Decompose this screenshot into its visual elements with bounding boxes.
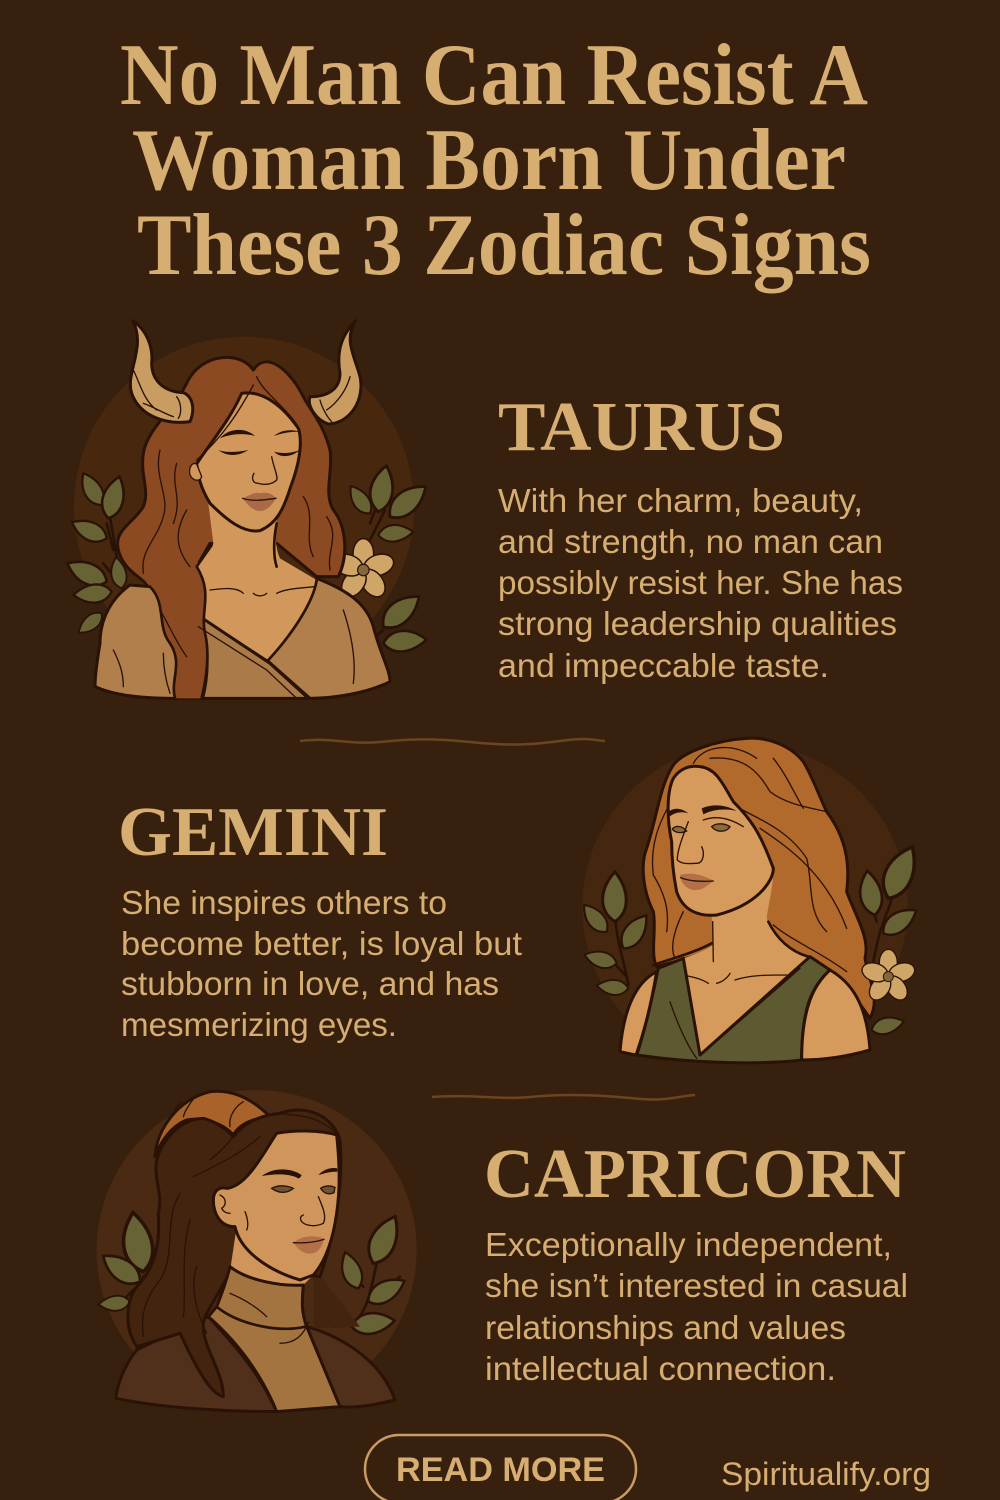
illustration: Gemini woman	[560, 738, 940, 1080]
text: Gemini description: She inspires others to	[121, 884, 447, 921]
Taurus left horn	[130, 321, 193, 422]
text: Capricorn description: relationships and values	[485, 1309, 846, 1346]
text: Gemini description	[121, 884, 522, 1043]
title: These 3 Zodiac Signs	[137, 197, 871, 294]
text: Taurus description: With her charm, beauty,	[498, 482, 863, 519]
illustration: Taurus woman with horns	[50, 321, 450, 710]
heading: Capricorn: CAPRICORN	[484, 1136, 906, 1213]
title: Woman Born Under	[132, 112, 846, 209]
text: Taurus description: and impeccable taste.	[498, 647, 829, 684]
text: Taurus description: and strength, no man can	[498, 523, 883, 560]
text: Gemini description: stubborn in love, and has	[121, 965, 499, 1002]
heading: Gemini: GEMINI	[118, 794, 388, 871]
text: Gemini description: become better, is loyal but	[121, 925, 522, 962]
Taurus right horn	[309, 321, 361, 424]
title	[120, 27, 871, 294]
text: Taurus description	[498, 482, 903, 684]
text: Capricorn description: intellectual connection.	[485, 1350, 836, 1387]
heading: Taurus: TAURUS	[498, 389, 785, 466]
Taurus front lock of hair	[130, 545, 212, 698]
illustration: Capricorn woman	[80, 1090, 430, 1428]
text: Gemini description: mesmerizing eyes.	[121, 1006, 397, 1043]
text: Capricorn description: she isn’t interested in casual	[485, 1267, 908, 1304]
site name: Spiritualify.org	[721, 1456, 931, 1492]
button: read more: READ MORE	[396, 1451, 605, 1489]
text: Capricorn description: Exceptionally independent,	[485, 1226, 892, 1263]
text: Taurus description: strong leadership qualities	[498, 605, 897, 642]
button: read more	[365, 1435, 636, 1500]
text: Taurus description: possibly resist her. She has	[498, 564, 903, 601]
text: Capricorn description	[485, 1226, 908, 1387]
title: No Man Can Resist A	[120, 27, 868, 124]
